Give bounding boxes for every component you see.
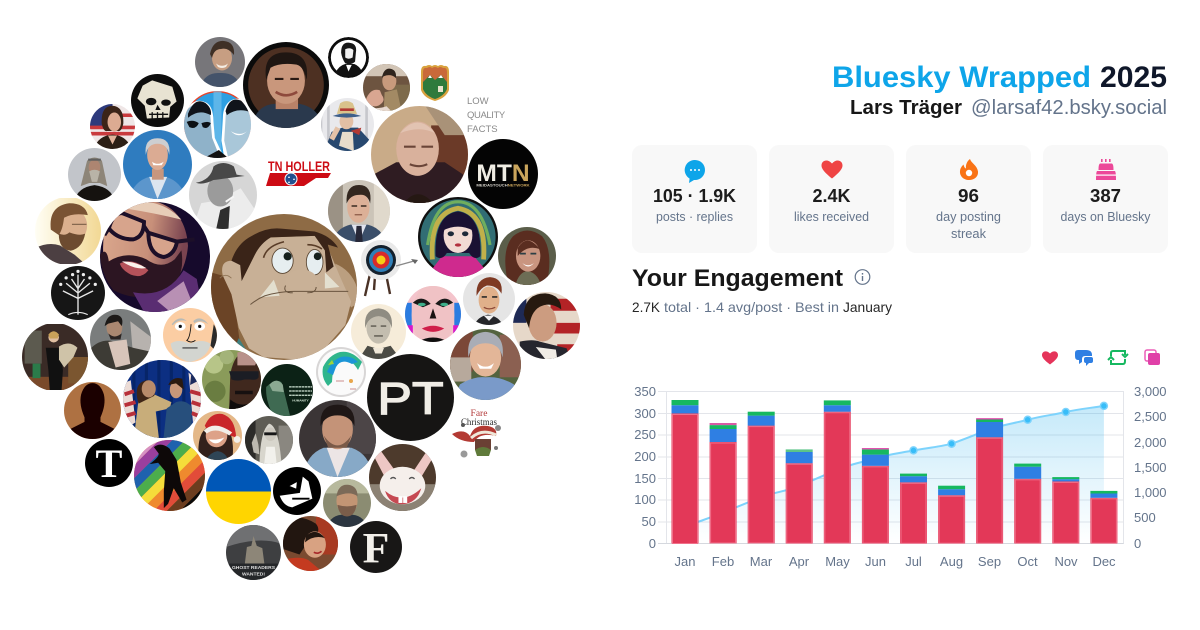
month labels: Aug	[940, 554, 963, 569]
avatar: Christmas text graphic	[452, 409, 501, 458]
avatar: F logo	[350, 521, 402, 573]
panel: posts and replies: 105 · 1.9K	[653, 186, 736, 206]
avatar: woman with flag	[90, 104, 135, 149]
avatar: Christmas text graphic: Fare	[471, 409, 487, 419]
avatar: man in fedora	[189, 161, 257, 229]
engagement summary	[632, 299, 892, 315]
month labels: May	[825, 554, 850, 569]
logo: TN Holler	[266, 158, 331, 186]
stacked bars	[672, 400, 1117, 544]
right axis labels: 2,000	[1134, 435, 1167, 450]
month labels: Jun	[865, 554, 886, 569]
icon: legend heart	[1042, 351, 1058, 364]
avatar: illustrated girl	[418, 197, 498, 277]
avatar: George Takei	[450, 329, 521, 400]
left axis labels: 200	[634, 449, 656, 464]
avatar: two men with red border	[184, 90, 250, 158]
avatar: black ship logo	[273, 467, 321, 515]
cumulative line	[685, 406, 1104, 527]
avatar: Uncle Sam	[321, 98, 374, 151]
avatar: Christmas text graphic: Christmas	[461, 417, 497, 427]
right axis labels	[1134, 384, 1167, 551]
avatar: dark green poster	[261, 364, 313, 416]
panel: posts and replies: posts · replies	[656, 209, 733, 224]
avatar: woman holding dog	[22, 324, 88, 390]
month labels: Jan	[675, 554, 695, 569]
icon: archery target	[361, 240, 418, 296]
avatar: New York Times logo: T	[96, 441, 123, 486]
month labels: Feb	[712, 554, 734, 569]
user name and handle: Lars Träger	[850, 97, 962, 119]
month labels: Oct	[1017, 554, 1038, 569]
avatar: man in suit	[328, 180, 390, 242]
avatar: silhouette on brown	[64, 382, 121, 439]
chart: monthly engagement	[634, 384, 1167, 569]
month labels: Dec	[1092, 554, 1116, 569]
avatar: woman with auburn hair	[498, 227, 556, 285]
right axis labels: 1,000	[1134, 485, 1167, 500]
avatar: MTN logo: MEIDASTOUCH NETWORK	[476, 184, 530, 188]
panel: days on Bluesky: 387	[1090, 186, 1121, 206]
month labels: Sep	[978, 554, 1001, 569]
avatar: young man before flag	[513, 292, 580, 359]
bar: Oct	[1014, 464, 1041, 543]
cumulative points	[910, 402, 1107, 454]
icon: heart	[822, 160, 842, 178]
text: low quality facts handwriting: LOW	[467, 96, 489, 107]
avatar: man in blue blazer	[299, 400, 376, 477]
panel: day posting streak: streak	[951, 226, 986, 241]
month labels: Apr	[789, 554, 810, 569]
bar: May	[824, 400, 851, 543]
engagement summary: 2.7K	[632, 299, 661, 315]
panel: likes received	[769, 145, 894, 253]
panel: days on Bluesky	[1043, 145, 1168, 253]
title: Bluesky Wrapped	[832, 61, 1091, 94]
bar: Apr	[786, 449, 813, 543]
month labels: Nov	[1054, 554, 1078, 569]
icon: info	[855, 270, 870, 284]
avatar: man with beard	[323, 479, 371, 527]
bar: Nov	[1052, 477, 1079, 543]
panel: day posting streak	[906, 145, 1031, 253]
avatar: MTN logo	[468, 139, 538, 209]
avatar: black and white blonde	[245, 416, 293, 464]
avatar: ghost poster: WANTED!	[241, 571, 265, 577]
avatar: man on blue	[123, 130, 192, 199]
panel: day posting streak: day posting	[936, 209, 1001, 224]
avatar: PT logo	[366, 354, 454, 440]
left axis labels: 50	[642, 514, 656, 529]
left axis labels: 350	[634, 384, 656, 399]
text: low quality facts handwriting	[467, 96, 505, 135]
avatar: lake map	[316, 347, 366, 397]
avatar: long grey hair man	[68, 148, 121, 201]
icon: legend replies	[1075, 350, 1093, 366]
avatar: man with black ring	[243, 42, 329, 128]
left axis labels: 150	[634, 471, 656, 486]
panel: likes received: likes received	[794, 209, 869, 224]
avatar: large cartoon character	[211, 214, 357, 360]
user name and handle	[850, 97, 1167, 119]
bar: Feb	[710, 423, 737, 543]
right axis labels: 0	[1134, 536, 1141, 551]
right axis labels: 500	[1134, 510, 1156, 525]
engagement summary: total · 1.4 avg/post · Best in	[664, 299, 839, 315]
bar: Jan	[672, 400, 698, 544]
panel: day posting streak: 96	[958, 186, 979, 206]
title: 2025	[1100, 61, 1167, 94]
avatar: man in sunglasses	[202, 350, 261, 409]
icon: chat bubble	[685, 160, 705, 183]
icon: flame	[960, 159, 978, 180]
avatar: PT logo: PT	[377, 373, 443, 424]
legend icons	[1042, 350, 1160, 366]
icon: legend reposts	[1108, 351, 1128, 364]
avatar: smiling rabbit	[368, 444, 436, 510]
panel: days on Bluesky: days on Bluesky	[1060, 209, 1151, 224]
avatar cluster	[22, 37, 580, 580]
avatar: Ukraine flag	[206, 459, 271, 524]
avatar: engraved portrait	[351, 304, 406, 359]
icon: badge logo	[421, 65, 449, 101]
left axis labels: 100	[634, 492, 656, 507]
avatar: cartoon old man	[163, 308, 217, 362]
avatar: skull	[131, 74, 184, 127]
month labels: Jul	[905, 554, 922, 569]
avatar: ghost poster: GHOST READERS	[231, 564, 275, 570]
bar: Dec	[1090, 491, 1117, 543]
avatar: New York Times logo	[85, 439, 133, 487]
avatar: laughing woman in santa hat	[193, 411, 242, 460]
avatar: bald man	[371, 106, 468, 203]
panel: likes received: 2.4K	[812, 186, 850, 206]
bar: Aug	[938, 486, 965, 543]
avatar: Lincoln portrait	[328, 37, 369, 78]
bar: Jun	[862, 448, 889, 543]
avatar: ghost poster	[226, 524, 280, 580]
avatar: man sitting on a couch	[90, 309, 151, 370]
text: low quality facts handwriting: QUALITY	[467, 110, 505, 121]
avatar: makeup portrait	[405, 286, 461, 342]
avatar: bearded man in profile	[35, 198, 101, 264]
avatar: smiling man with glasses, purple tint	[100, 202, 210, 312]
grid lines	[658, 391, 1124, 544]
right axis labels: 2,500	[1134, 409, 1167, 424]
bar: Mar	[748, 412, 775, 543]
avatar: doll with red hair	[463, 273, 515, 325]
icon: legend quotes	[1145, 350, 1160, 365]
text: low quality facts handwriting: FACTS	[467, 124, 498, 135]
avatar: white tree on black	[51, 266, 105, 320]
bar: Jul	[900, 474, 927, 543]
avatar: two people shaking hands before flags	[123, 360, 201, 438]
left axis labels: 250	[634, 427, 656, 442]
left axis labels: 300	[634, 406, 656, 421]
right axis labels: 1,500	[1134, 460, 1167, 475]
avatar: dark green poster: HUMANITY	[292, 398, 310, 402]
avatar: pride flag silhouette	[134, 440, 205, 511]
avatar: F logo: F	[363, 525, 389, 573]
left axis labels: 0	[649, 536, 656, 551]
avatar: man with hands at window	[363, 64, 410, 111]
cumulative area	[685, 406, 1104, 543]
month labels: Mar	[750, 554, 773, 569]
engagement summary: January	[843, 299, 892, 315]
month labels	[675, 554, 1116, 569]
avatar: 1920s woman	[283, 516, 338, 570]
panel: posts and replies	[632, 145, 757, 253]
avatar: MTN logo: MTN	[476, 160, 530, 187]
bar: Sep	[976, 418, 1003, 543]
left axis labels	[634, 384, 656, 551]
icon: birthday cake	[1096, 159, 1116, 180]
right axis labels: 3,000	[1134, 384, 1167, 399]
heading: your engagement: Your Engagement	[632, 265, 843, 292]
avatar: man on grey wall	[195, 37, 245, 87]
user name and handle: @larsaf42.bsky.social	[971, 97, 1167, 119]
